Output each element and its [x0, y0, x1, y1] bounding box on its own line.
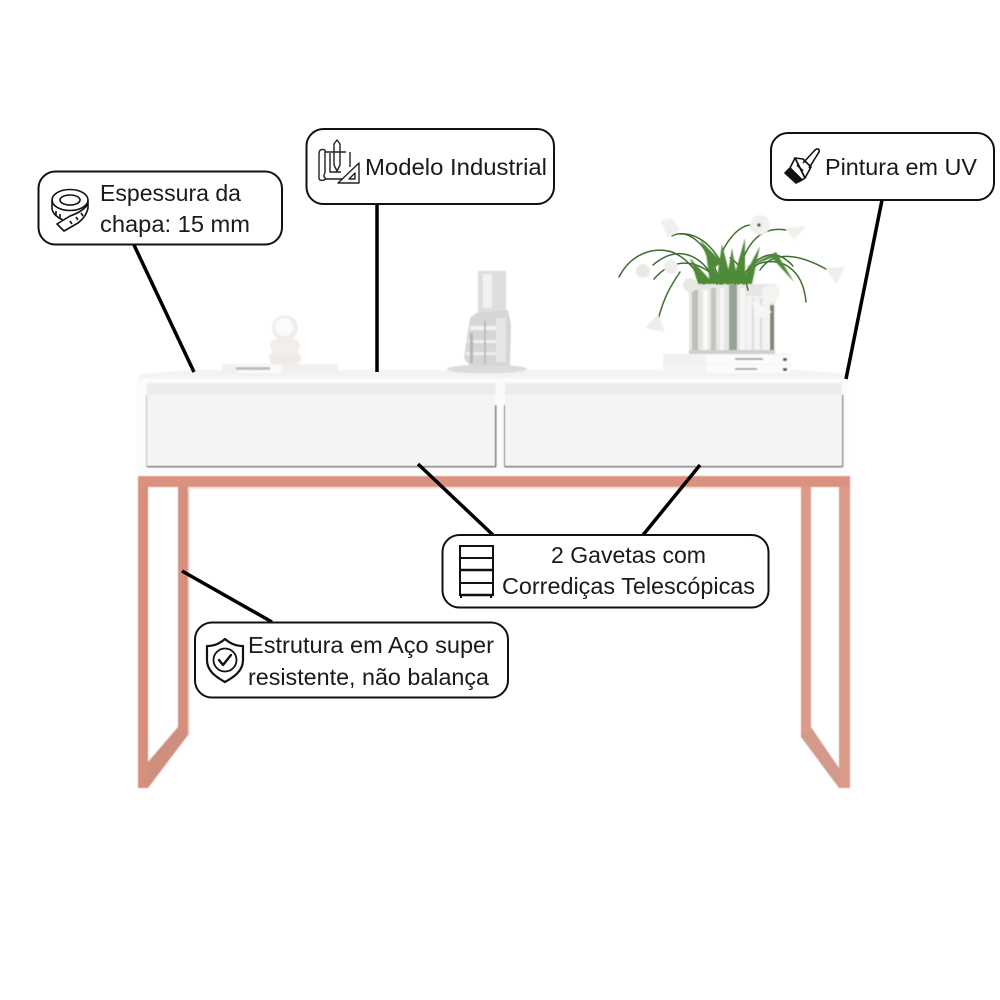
line: industrial callout [375, 204, 379, 372]
line: steel structure [182, 571, 272, 622]
icon: blueprint and ruler [319, 140, 359, 183]
decor: book and sphere [222, 315, 338, 374]
text: thickness: chapa: 15 mm [100, 211, 250, 237]
icon: measuring tape [52, 190, 88, 231]
text: industrial model: Modelo Industrial [365, 154, 547, 180]
icon: paint brush [785, 149, 819, 183]
callout: UV paint [771, 133, 994, 200]
line: UV callout [846, 200, 882, 379]
right drawer [504, 395, 844, 468]
left drawer [146, 395, 496, 468]
left leg frame [138, 476, 190, 788]
callout: drawers [442, 535, 768, 608]
foliage [619, 225, 826, 320]
icon: drawer unit [460, 546, 493, 598]
flowers [636, 215, 845, 332]
pink rail [138, 476, 850, 487]
text: steel structure: resistente, não balança [248, 664, 490, 690]
text: drawers: 2 Gavetas com [551, 542, 706, 568]
desk illustration [137, 370, 850, 788]
decor: flower vase on books [619, 215, 845, 373]
leaves [690, 238, 794, 284]
decor: glass sculpture [447, 271, 527, 374]
right leg frame [801, 476, 850, 788]
desk body [137, 378, 848, 476]
callout: thickness [38, 172, 282, 244]
text: drawers: Corrediças Telescópicas [502, 573, 755, 599]
connector lines [134, 200, 882, 622]
text: UV paint: Pintura em UV [825, 154, 977, 180]
line: drawer left [418, 464, 493, 535]
callout: industrial model [306, 129, 554, 204]
recess [147, 383, 496, 395]
line: thickness callout [134, 245, 194, 372]
vase [689, 284, 775, 354]
icon: shield check [207, 639, 243, 682]
desk top [137, 370, 848, 383]
line: drawer right [643, 465, 700, 535]
text: thickness: Espessura da [100, 180, 242, 206]
text: steel structure: Estrutura em Aço super [248, 632, 494, 658]
books [663, 354, 791, 373]
callout: steel structure [195, 622, 508, 698]
